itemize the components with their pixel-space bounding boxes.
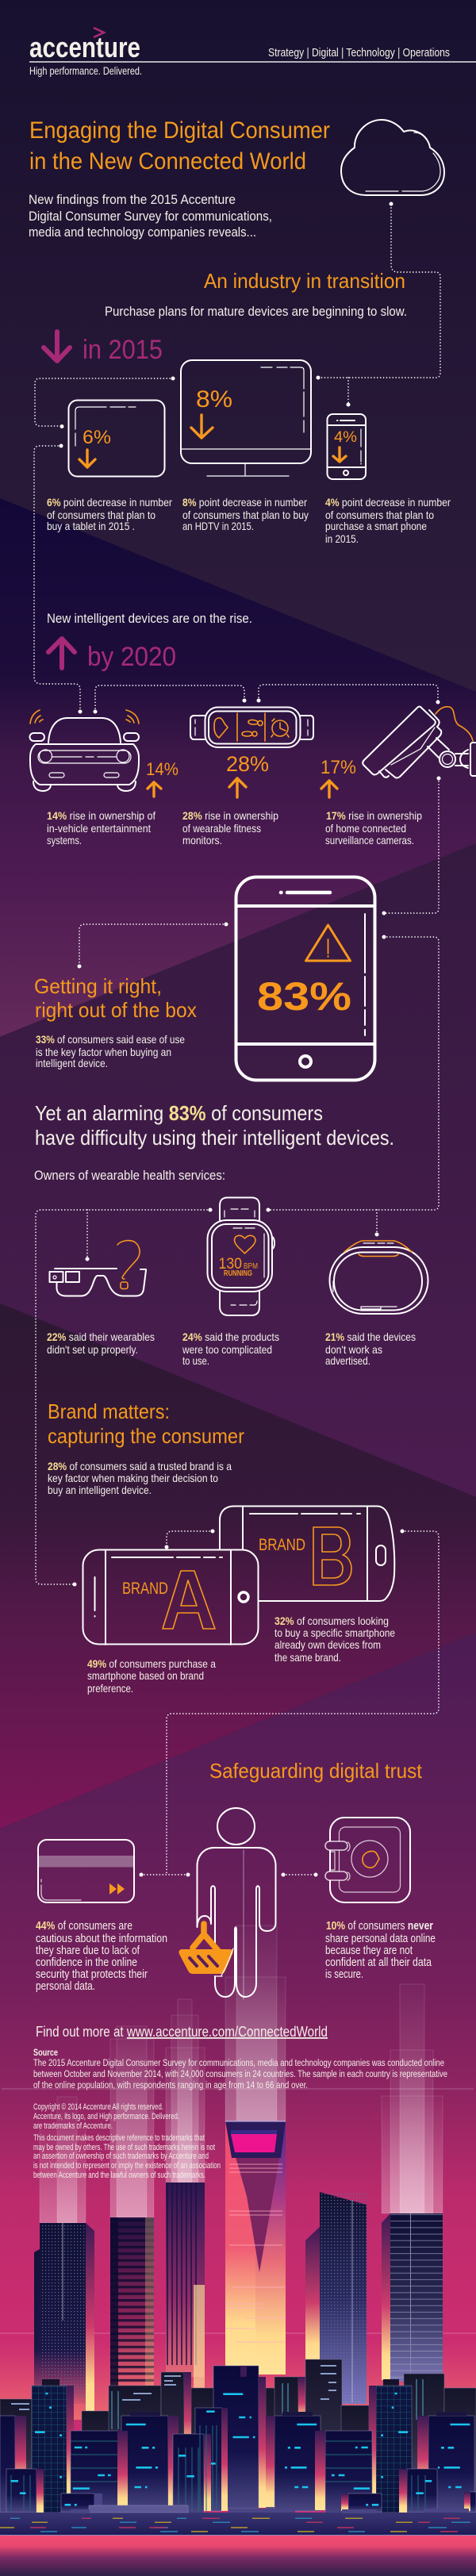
dotted connector network xyxy=(34,202,441,1877)
icon: smartphone with 4%: 4% xyxy=(334,429,357,446)
caption: never share data: confident at all their data xyxy=(325,1956,432,1969)
arrow: orange up xyxy=(148,782,161,797)
text: ease of use: is the key factor when buying an xyxy=(36,1046,171,1058)
heading: safeguarding digital trust: Safeguarding digital trust xyxy=(209,1759,423,1783)
icon: phone brand B: BRAND xyxy=(259,1536,305,1554)
logo strapline: High performance. Delivered. xyxy=(29,64,142,77)
copyright note: between Accenture and the lawful owners of such trademarks. xyxy=(33,2171,205,2180)
copyright note: are trademarks of Accenture. xyxy=(33,2121,113,2131)
safe lock xyxy=(363,1851,379,1868)
caption: in-vehicle systems xyxy=(47,810,155,847)
copyright note: This document makes descriptive reference to trademarks that xyxy=(33,2133,205,2143)
icon: large phone with 83% alert: 83% xyxy=(257,974,351,1019)
text: ease of use: intelligent device. xyxy=(36,1058,108,1069)
icon: surveillance camera xyxy=(363,707,476,777)
stat: 17% rise xyxy=(321,757,356,797)
caption: smartphone decrease xyxy=(325,497,451,545)
tower: right xyxy=(382,2213,443,2382)
text: trusted brand: 28% of consumers said a trusted brand is a xyxy=(48,1461,232,1472)
tower: striped xyxy=(110,2217,154,2387)
camera cable xyxy=(436,707,473,741)
front row buildings xyxy=(0,2366,476,2514)
label: down in 2015: in 2015 xyxy=(83,335,163,365)
neon floor strip xyxy=(0,2536,476,2576)
label: up by 2020 xyxy=(48,639,176,672)
caption: in-vehicle systems: systems. xyxy=(47,835,82,847)
copyright note: Accenture, its logo, and High performance. Delivered. xyxy=(33,2112,179,2121)
alarm clock xyxy=(272,720,288,736)
footprints xyxy=(242,720,263,736)
title: Engaging the Digital Consumer xyxy=(29,117,330,144)
logo chevron xyxy=(94,28,104,37)
illustration: neon city skyline xyxy=(0,2121,476,2576)
caption: online security: personal data. xyxy=(36,1980,95,1993)
caption: hdtv decrease: an HDTV in 2015. xyxy=(182,520,254,532)
logo wordmark: accenture xyxy=(29,31,140,63)
caption: brand preference: smartphone based on brand xyxy=(87,1670,204,1682)
road and platforms xyxy=(0,2505,476,2536)
text: ease of use xyxy=(36,1034,185,1069)
cyan lit windows xyxy=(10,2394,470,2505)
caption: surveillance cameras: of home connected xyxy=(325,823,406,835)
caption: same brand: 32% of consumers looking xyxy=(274,1615,389,1627)
road traffic lights xyxy=(0,2518,470,2532)
icon: person carrying basket xyxy=(178,1808,276,1999)
caption: surveillance cameras xyxy=(325,810,422,847)
caption: set up: 22% said their wearables xyxy=(47,1331,155,1343)
caption: complicated: to use. xyxy=(182,1355,209,1367)
shopping basket xyxy=(193,1924,219,1952)
caption: fitness monitors: 28% rise in ownership xyxy=(182,810,278,822)
heading: an industry in transition: An industry in transition xyxy=(204,269,405,293)
icon: smartphone with 4% xyxy=(327,414,366,479)
caption: smartphone decrease: of consumers that plan to xyxy=(325,509,434,521)
arrow: magenta up xyxy=(48,639,75,668)
icon: smart glasses with question mark xyxy=(49,1241,146,1296)
arrow: orange down xyxy=(79,450,95,467)
tower: central twin xyxy=(225,2121,286,2374)
wifi signals xyxy=(30,710,139,724)
caption: never share data xyxy=(325,1920,436,1981)
header rule xyxy=(29,61,476,63)
caption: same brand xyxy=(274,1615,395,1664)
text: trusted brand xyxy=(48,1461,232,1496)
icon: safe xyxy=(325,1818,410,1902)
caption: same brand: to buy a specific smartphone xyxy=(274,1627,395,1639)
caption: never share data: 10% of consumers never xyxy=(326,1920,433,1933)
heading: brand matters xyxy=(48,1399,244,1448)
translucent background towers xyxy=(0,1925,476,2333)
heading: brand matters: capturing the consumer xyxy=(48,1424,244,1448)
icon: smart watch: RUNNING xyxy=(224,1269,252,1278)
heading: brand matters: Brand matters: xyxy=(48,1399,170,1423)
caption: smartphone decrease: purchase a smart phone xyxy=(325,520,427,532)
stat: 28% rise: 28% xyxy=(226,752,269,776)
intro text: Digital Consumer Survey for communications, xyxy=(29,209,272,224)
heading: getting it right: Getting it right, xyxy=(34,974,162,998)
caption: surveillance cameras: surveillance cameras. xyxy=(325,835,414,847)
caption: tablet decrease: 6% point decrease in number xyxy=(47,497,172,509)
header with logo and tagline xyxy=(29,28,476,77)
icon: hdtv with 8%: 8% xyxy=(196,386,232,413)
title: in the New Connected World xyxy=(29,148,306,175)
text: ease of use: 33% of consumers said ease of use xyxy=(36,1034,185,1046)
icon: smart watch: 130 xyxy=(219,1256,242,1273)
copyright note: an assertion of ownership of such trademarks by Accenture and xyxy=(33,2152,209,2161)
caption: advertised: advertised. xyxy=(325,1355,370,1367)
icon: phone brand B xyxy=(220,1506,394,1601)
caption: brand preference: 49% of consumers purchase a xyxy=(87,1658,216,1670)
caption: hdtv decrease: 8% point decrease in number xyxy=(182,497,307,509)
source note: of the online population, with respondents ranging in age from 14 to 66 and over. xyxy=(33,2079,308,2090)
subheading: owners of wearables: Owners of wearable health services: xyxy=(34,1168,225,1183)
caption: tablet decrease xyxy=(47,497,172,532)
statement: alarming 83%: Yet an alarming 83% of consumers xyxy=(35,1101,323,1125)
stat: 28% rise xyxy=(226,752,269,797)
caption: complicated xyxy=(182,1331,279,1367)
intro text: media and technology companies reveals... xyxy=(29,225,256,240)
stat: 17% rise: 17% xyxy=(321,757,356,778)
arrow: orange up xyxy=(321,781,337,797)
caption: never share data: share personal data online xyxy=(325,1933,436,1945)
caption: same brand: already own devices from xyxy=(274,1639,381,1651)
caption: online security: security that protects their xyxy=(36,1968,148,1981)
copyright note: Copyright © 2014 Accenture All rights reserved. xyxy=(33,2102,163,2112)
caption: in-vehicle systems: 14% rise in ownership of xyxy=(47,810,155,822)
icon: connected car xyxy=(30,710,139,791)
central tower window xyxy=(231,2134,277,2152)
intro text xyxy=(29,192,272,240)
text: trusted brand: buy an intelligent device. xyxy=(48,1484,152,1496)
letter B xyxy=(313,1527,351,1585)
caption: brand preference xyxy=(87,1658,216,1695)
teal grid buildings xyxy=(32,2386,412,2513)
letter A xyxy=(163,1571,215,1629)
text: trusted brand: key factor when making their decision to xyxy=(48,1472,218,1484)
warning triangle xyxy=(306,925,351,961)
icon: credit card xyxy=(38,1840,134,1902)
fast-forward arrows xyxy=(109,1883,125,1895)
caption: online security: 44% of consumers are xyxy=(36,1920,132,1933)
icon: fitness band xyxy=(190,708,313,747)
subheading: purchase plans: Purchase plans for mature devices are beginning to slow. xyxy=(105,304,407,319)
icon: large phone with 83% alert xyxy=(236,877,374,1081)
label: down in 2015 xyxy=(44,332,163,365)
arrow: orange down xyxy=(333,447,346,462)
subheading: intelligent devices rising: New intelligent devices are on the rise. xyxy=(47,611,252,626)
caption: smartphone decrease: 4% point decrease in number xyxy=(325,497,451,509)
icon: tablet with 6%: 6% xyxy=(83,427,111,448)
intro text: New findings from the 2015 Accenture xyxy=(29,192,236,207)
statement: alarming 83%: have difficulty using their intelligent devices. xyxy=(35,1126,394,1150)
caption: never share data: is secure. xyxy=(325,1968,363,1981)
caption: hdtv decrease: of consumers that plan to buy xyxy=(182,509,309,521)
link: find out more: Find out more at www.accenture.com/ConnectedWorld xyxy=(36,2024,328,2040)
caption: online security: cautious about the information xyxy=(36,1933,167,1945)
caption: in-vehicle systems: in-vehicle entertainment xyxy=(47,823,151,835)
caption: fitness monitors: of wearable fitness xyxy=(182,823,261,835)
caption: advertised: don't work as xyxy=(325,1344,382,1356)
heading: getting it right xyxy=(34,974,197,1022)
caption: fitness monitors: monitors. xyxy=(182,835,222,847)
label: up by 2020: by 2020 xyxy=(87,642,176,672)
arrow: orange up xyxy=(229,778,246,797)
caption: advertised: 21% said the devices xyxy=(325,1331,416,1343)
copyright note: may be owned by others. The use of such trademarks herein is not xyxy=(33,2143,215,2152)
tower: right centre xyxy=(305,2192,367,2404)
title xyxy=(29,117,330,175)
icon: hdtv with 8% xyxy=(181,360,311,476)
stat: 14% rise: 14% xyxy=(146,759,178,779)
caption: online security: they share due to lack of xyxy=(36,1944,140,1957)
caption: online security: confidence in the online xyxy=(36,1956,137,1969)
caption: fitness monitors xyxy=(182,810,278,847)
caption: same brand: the same brand. xyxy=(274,1652,341,1664)
source note xyxy=(33,2047,447,2090)
heart xyxy=(214,718,228,738)
tower: vertical stripes xyxy=(166,2182,205,2388)
icon: tablet with 6% xyxy=(68,400,165,476)
arrow: magenta down xyxy=(44,332,70,361)
caption: tablet decrease: of consumers that plan to xyxy=(47,509,155,521)
icon: phone brand A xyxy=(83,1550,259,1645)
caption: online security xyxy=(36,1920,167,1993)
tower: left dark xyxy=(34,2223,94,2412)
caption: surveillance cameras: 17% rise in ownership xyxy=(326,810,422,822)
heading: getting it right: right out of the box xyxy=(35,998,197,1022)
caption: tablet decrease: buy a tablet in 2015 . xyxy=(47,520,135,532)
caption: set up xyxy=(47,1331,155,1356)
caption: advertised xyxy=(325,1331,416,1367)
caption: hdtv decrease xyxy=(182,497,309,532)
icon: smart watch xyxy=(208,1198,274,1315)
caption: brand preference: preference. xyxy=(87,1683,133,1695)
stat: 14% rise xyxy=(146,759,178,797)
icon: cloud xyxy=(341,120,444,195)
copyright note: is not intended to represent or imply the existence of an association xyxy=(33,2161,221,2171)
icon: smart watch: BPM xyxy=(244,1262,258,1271)
caption: smartphone decrease: in 2015. xyxy=(325,533,359,545)
back row buildings xyxy=(0,2359,476,2510)
arrow: orange down xyxy=(191,415,213,438)
icon: phone brand A: BRAND xyxy=(122,1580,168,1598)
copyright note xyxy=(33,2102,221,2180)
heart xyxy=(235,1235,255,1253)
source note: Source xyxy=(33,2047,58,2058)
caption: set up: didn't set up properly. xyxy=(47,1344,138,1356)
statement: alarming 83% xyxy=(35,1101,394,1150)
question mark xyxy=(117,1241,140,1279)
caption: complicated: 24% said the products xyxy=(182,1331,279,1343)
icon: wrist band xyxy=(330,1241,428,1314)
caption: never share data: because they are not xyxy=(325,1944,413,1957)
caption: complicated: were too complicated xyxy=(182,1344,272,1356)
